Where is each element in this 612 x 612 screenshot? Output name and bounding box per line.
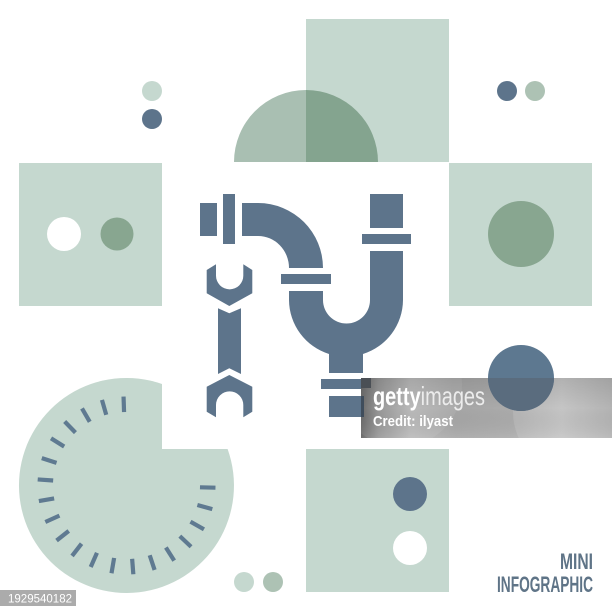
dial chart with ticks [19,378,234,593]
title: mini infographic [497,549,593,597]
large dark circle over banner [488,345,554,411]
watermark credit text: Credit: ilyast [373,413,453,430]
image id tag: 1929540182 [8,594,72,606]
image id tag [0,590,76,606]
dial ticks [38,397,215,574]
top-right dot pair [497,81,545,101]
semicircle on top square [234,90,378,162]
dial body [19,378,234,593]
panel: left square [19,163,162,306]
panel: right square [449,163,592,306]
title: mini infographic: MINI [560,549,593,574]
right square circle [488,201,554,267]
bottom dot pair [234,572,283,592]
bottom square dots [393,477,427,565]
top-left dot pair [142,81,162,129]
icon: pipe [200,194,411,417]
panel: bottom square [306,449,449,592]
watermark banner [361,378,612,438]
watermark logo text: gettyimages [373,381,485,411]
left square dots [47,217,134,251]
panel: top square [306,19,449,162]
icon: wrench [207,264,252,417]
